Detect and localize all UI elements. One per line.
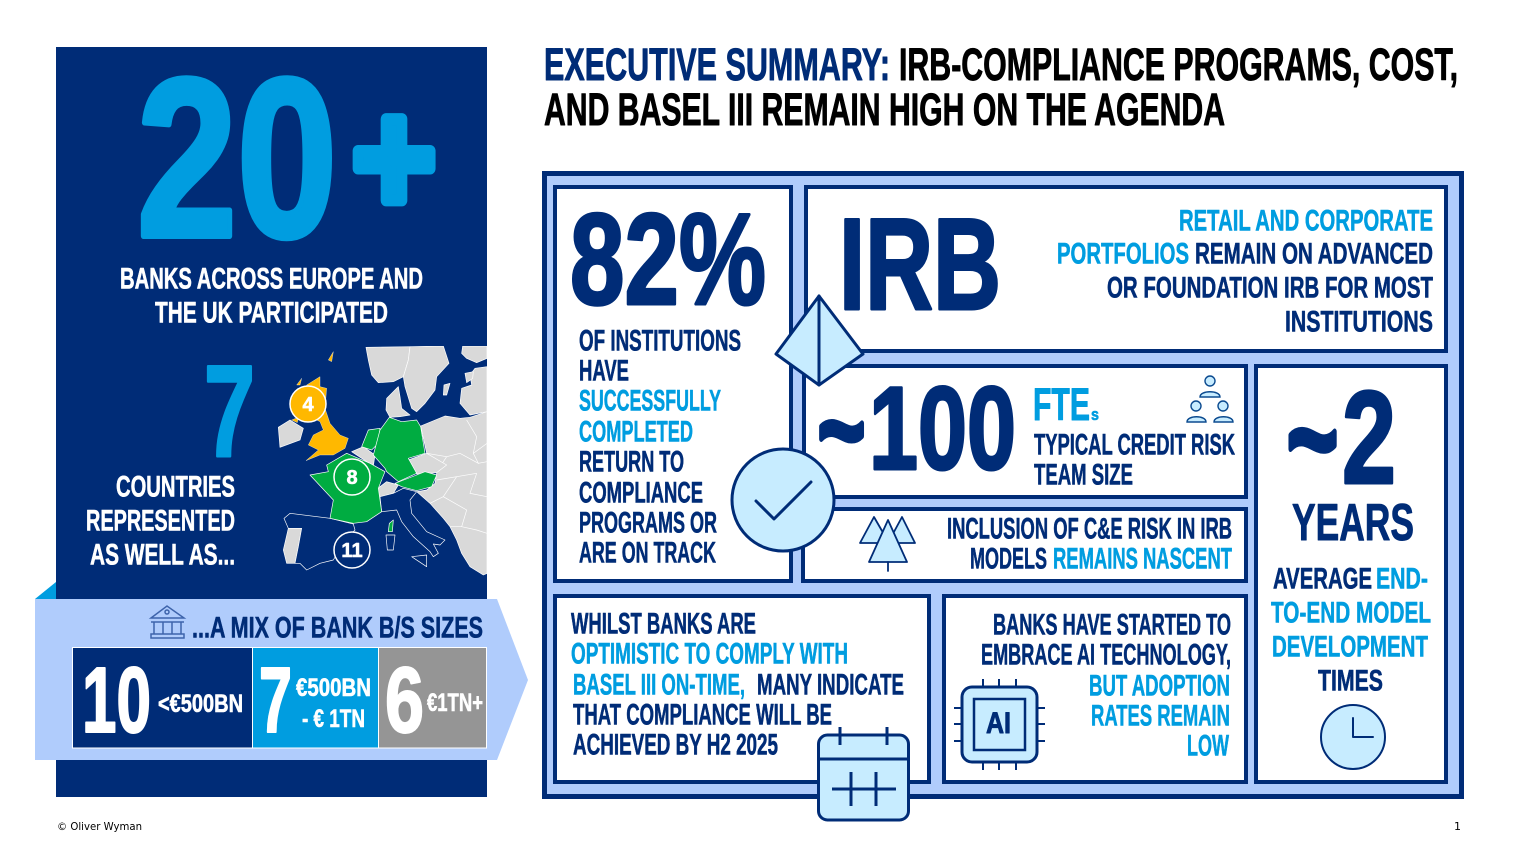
stat: ~100: ~ (818, 364, 865, 496)
stat: ~2 years (1287, 364, 1414, 552)
text: countries represented (86, 470, 235, 572)
icon: people (1187, 376, 1233, 422)
map badge: 11: 11 (341, 540, 363, 562)
banner heading: ...A MIX OF BANK B/S SIZES (192, 612, 483, 644)
text: institutions on track: OF INSTITUTIONS (579, 324, 741, 358)
panel: participation sidebar (56, 31, 487, 797)
text: typical credit risk team size: TEAM SIZE (1034, 458, 1133, 492)
icon: clock (1321, 705, 1385, 769)
big number: 20+ banks: + (352, 68, 436, 247)
text: typical credit risk team size: TYPICAL CREDIT RISK (1034, 428, 1235, 462)
text: IRB portfolios (1057, 204, 1433, 338)
title (544, 39, 1458, 135)
map badge: 4: 4 (302, 394, 314, 416)
footer: page number: 1 (1454, 820, 1461, 833)
text: C&E risk nascent: INCLUSION OF C&E RISK IN IRB (947, 512, 1232, 546)
text: institutions on track: COMPLETED (579, 416, 693, 448)
text: institutions on track: ARE ON TRACK (579, 536, 716, 570)
text: Basel III timing (571, 608, 904, 762)
label: FTEs: s (1091, 405, 1099, 424)
footer: copyright: © Oliver Wyman (57, 820, 142, 833)
text: model development times: END- (1376, 562, 1428, 596)
icon: check mark (732, 449, 834, 551)
text: model development times: DEVELOPMENT (1272, 630, 1428, 664)
icon: trees (860, 517, 915, 571)
map badge: 11 (334, 532, 370, 568)
text: institutions on track: COMPLIANCE (579, 476, 703, 510)
big number: 7 countries: 7 (204, 338, 255, 484)
stat: ~2 years: ~ (1287, 365, 1338, 512)
text: countries represented: AS WELL AS... (90, 538, 235, 572)
text: typical credit risk team size (1034, 428, 1235, 492)
text: Basel III timing: THAT COMPLIANCE WILL BE (573, 698, 832, 732)
cell: over 1tn: €1TN+ (427, 689, 483, 717)
map badge: 8: 8 (346, 467, 358, 489)
panel: C&E risk (803, 509, 1246, 581)
text: Basel III timing: OPTIMISTIC TO COMPLY WITH (571, 638, 848, 670)
text: institutions on track (579, 324, 741, 570)
banner: mix of bank sizes (35, 582, 528, 760)
text: model development times (1271, 562, 1431, 698)
cell: 500bn to 1tn: €500BN (296, 674, 371, 702)
icon: calendar (818, 727, 908, 820)
text: AI adoption: RATES REMAIN (1091, 700, 1230, 732)
cell: over 1tn (378, 648, 486, 752)
text: model development times: TIMES (1318, 664, 1383, 698)
text: IRB portfolios: INSTITUTIONS (1285, 306, 1433, 338)
text: AI adoption: EMBRACE AI TECHNOLOGY, (981, 638, 1231, 672)
panel: AI adoption (944, 596, 1246, 782)
cell: over 1tn: 6 (385, 648, 424, 752)
text: Basel III timing: BASEL III ON-TIME, (573, 668, 745, 702)
text: model development times: TO-END MODEL (1271, 596, 1431, 630)
text: institutions on track: SUCCESSFULLY (579, 384, 721, 418)
cell: 500bn to 1tn (252, 648, 378, 752)
panel: team size (804, 363, 1246, 497)
text: Basel III timing: MANY INDICATE (757, 668, 904, 702)
text: banks across Europe and the UK: THE UK PARTICIPATED (155, 296, 388, 330)
map badge: 4 (290, 386, 326, 422)
icon: diamond (776, 296, 863, 385)
text: banks across Europe and the UK: BANKS ACROSS EUROPE AND (120, 262, 423, 296)
stat: IRB: IRB (839, 191, 1001, 337)
text: AI adoption (981, 608, 1231, 762)
stat: ~100 (818, 363, 1016, 496)
cell: 500bn to 1tn: - € 1TN (302, 705, 365, 733)
text: banks across Europe and the UK (120, 262, 423, 330)
text: Basel III timing: WHILST BANKS ARE (571, 608, 756, 640)
text: countries represented: REPRESENTED (86, 504, 235, 538)
text: C&E risk nascent (947, 512, 1232, 576)
map of Europe (278, 346, 487, 575)
text: model development times: AVERAGE (1273, 562, 1372, 596)
text: AI adoption: BANKS HAVE STARTED TO (993, 608, 1231, 642)
stat: 82%: 82% (570, 186, 766, 332)
panel: 82 percent (555, 186, 791, 581)
text: institutions on track: HAVE (579, 354, 629, 388)
icon: AI chip (954, 679, 1045, 770)
map badge: 8 (334, 459, 370, 495)
text: C&E risk nascent: REMAINS NASCENT (1053, 542, 1232, 576)
icon: bank (151, 606, 184, 638)
cell: under 500bn: <€500BN (158, 690, 243, 718)
text: C&E risk nascent: MODELS (970, 542, 1047, 576)
big number: 20+ banks: 20 (137, 31, 337, 284)
cell: 500bn to 1tn: 7 (259, 648, 292, 752)
label: FTEs: FTE (1033, 379, 1090, 430)
stat: ~2 years: YEARS (1292, 494, 1414, 552)
text: institutions on track: RETURN TO (579, 446, 684, 478)
title: EXECUTIVE SUMMARY: (544, 39, 890, 90)
text: institutions on track: PROGRAMS OR (579, 506, 717, 540)
stat: ~2 years: 2 (1342, 364, 1396, 511)
text: IRB portfolios: PORTFOLIOS (1057, 238, 1189, 270)
panel: Basel III (555, 596, 929, 782)
icon: AI chip: AI (986, 707, 1011, 740)
cell: under 500bn (72, 648, 252, 752)
text: AI adoption: BUT ADOPTION (1089, 670, 1230, 702)
text: AI adoption: LOW (1187, 730, 1229, 762)
cell: under 500bn: 10 (82, 648, 151, 752)
stat: ~100: 100 (869, 363, 1016, 495)
panel: IRB (806, 187, 1446, 351)
panel: two years (1256, 364, 1446, 782)
text: Basel III timing: ACHIEVED BY H2 2025 (573, 728, 778, 762)
text: countries represented: COUNTRIES (116, 470, 235, 504)
panel: findings frame (544, 174, 1462, 820)
